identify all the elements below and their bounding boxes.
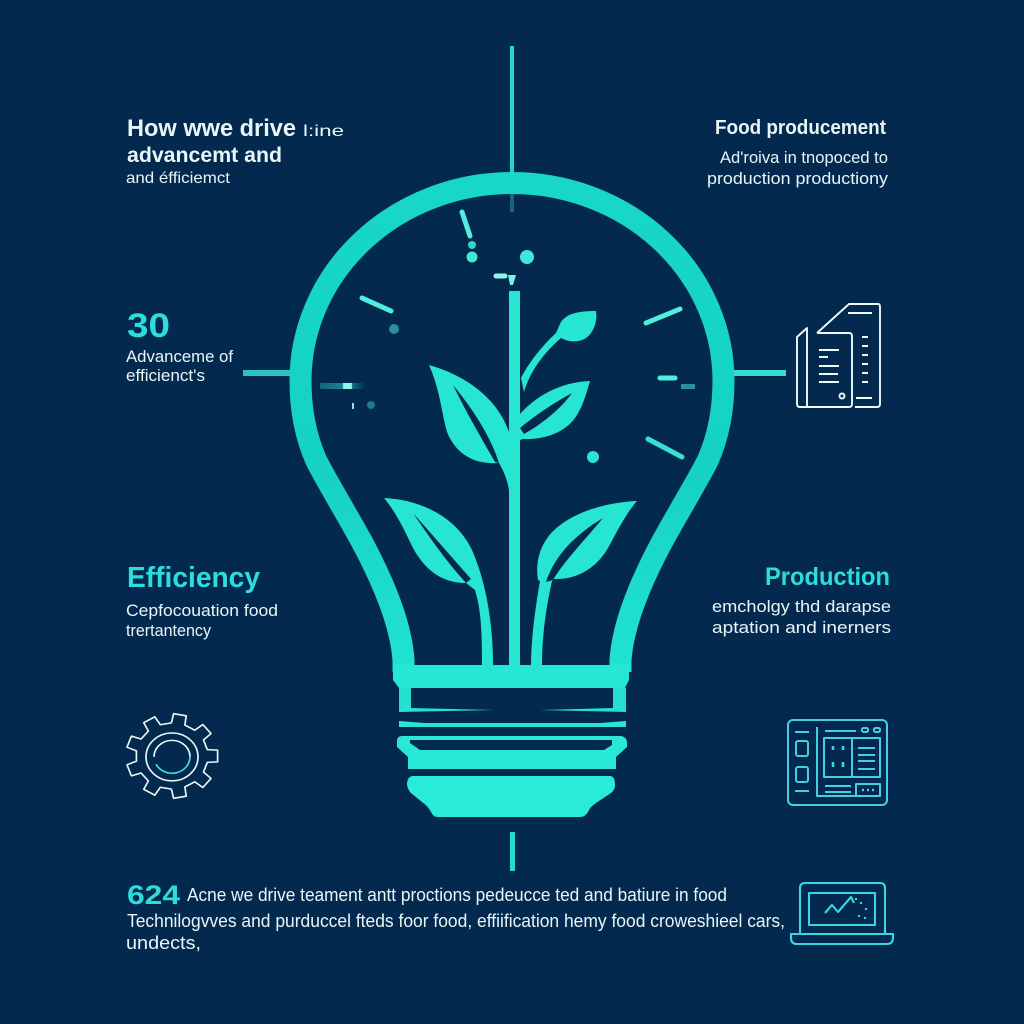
central stem [509, 291, 520, 666]
sparks and dots inside bulb [320, 194, 695, 463]
text: 30 stat: 30 [127, 307, 170, 345]
icon: laptop chart [791, 883, 893, 944]
icon: dashboard [788, 720, 887, 805]
upper right leaf [520, 381, 590, 440]
text: production: Production [765, 563, 890, 591]
text: efficiency: Cepfocouation food [126, 601, 278, 620]
icon: documents [797, 304, 880, 407]
lower left leaf with stalk [384, 498, 493, 666]
faint top line segment [510, 194, 514, 212]
text: top left heading [126, 115, 344, 187]
text: production [712, 563, 891, 637]
left connector line [243, 370, 290, 376]
lower right leaf with stalk [531, 501, 637, 666]
thin thread bar [399, 721, 626, 727]
text: bottom stat and paragraph: Acne we drive teament antt proctions pedeucce ted and batiure in food [187, 885, 727, 905]
right connector line [734, 370, 786, 376]
text: top left heading: and éfficiemct [126, 170, 231, 187]
screw thread band [397, 736, 627, 769]
text: production: aptation and inerners [712, 618, 891, 637]
spark marks [362, 212, 682, 457]
bulb glass outline [300, 183, 724, 672]
plant illustration [384, 291, 637, 666]
text: efficiency [126, 562, 278, 640]
upper right leaf vein [520, 393, 572, 434]
dim right dash [681, 384, 695, 389]
text: 30 stat: Advanceme of [126, 347, 233, 366]
text: food production: Food producement [715, 117, 886, 139]
small wedge [508, 275, 516, 285]
bottom vertical line [510, 832, 515, 871]
lightbulb illustration [300, 183, 724, 817]
text: bottom stat and paragraph [126, 880, 785, 953]
text: top left heading: How wwe drive [127, 115, 296, 142]
blurred left dash [320, 383, 365, 389]
text: bottom stat and paragraph: Technilogvves and purduccel fteds foor food, effiification hemy food croweshieel cars, [127, 911, 785, 931]
text: production: emcholgy thd darapse [712, 597, 891, 616]
dots [367, 241, 599, 463]
text: food production: production productiony [707, 169, 889, 188]
top vertical line [510, 46, 514, 176]
text: efficiency: trertantency [126, 621, 211, 640]
upper left leaf [429, 365, 509, 490]
bulb base cap [407, 776, 615, 817]
text: 30 stat [126, 307, 233, 385]
text: bottom stat and paragraph: 624 [127, 880, 180, 910]
text: top left heading: l:ine [303, 123, 344, 140]
lower left leaf vein [413, 513, 471, 583]
bulb neck thread [399, 688, 626, 712]
lower right leaf vein [546, 518, 603, 582]
text: bottom stat and paragraph: undects, [126, 933, 201, 953]
upper left leaf vein [453, 385, 499, 463]
small left tick [352, 403, 354, 409]
text: food production [707, 117, 889, 188]
bulb collar [393, 665, 629, 688]
flower bud with stalk [521, 311, 596, 392]
text: efficiency: Efficiency [127, 562, 260, 594]
text: food production: Ad'roiva in tnopoced to [720, 148, 888, 167]
text: 30 stat: efficienct's [126, 366, 205, 385]
text: top left heading: advancemt and [127, 144, 282, 167]
icon: gear [127, 714, 218, 798]
